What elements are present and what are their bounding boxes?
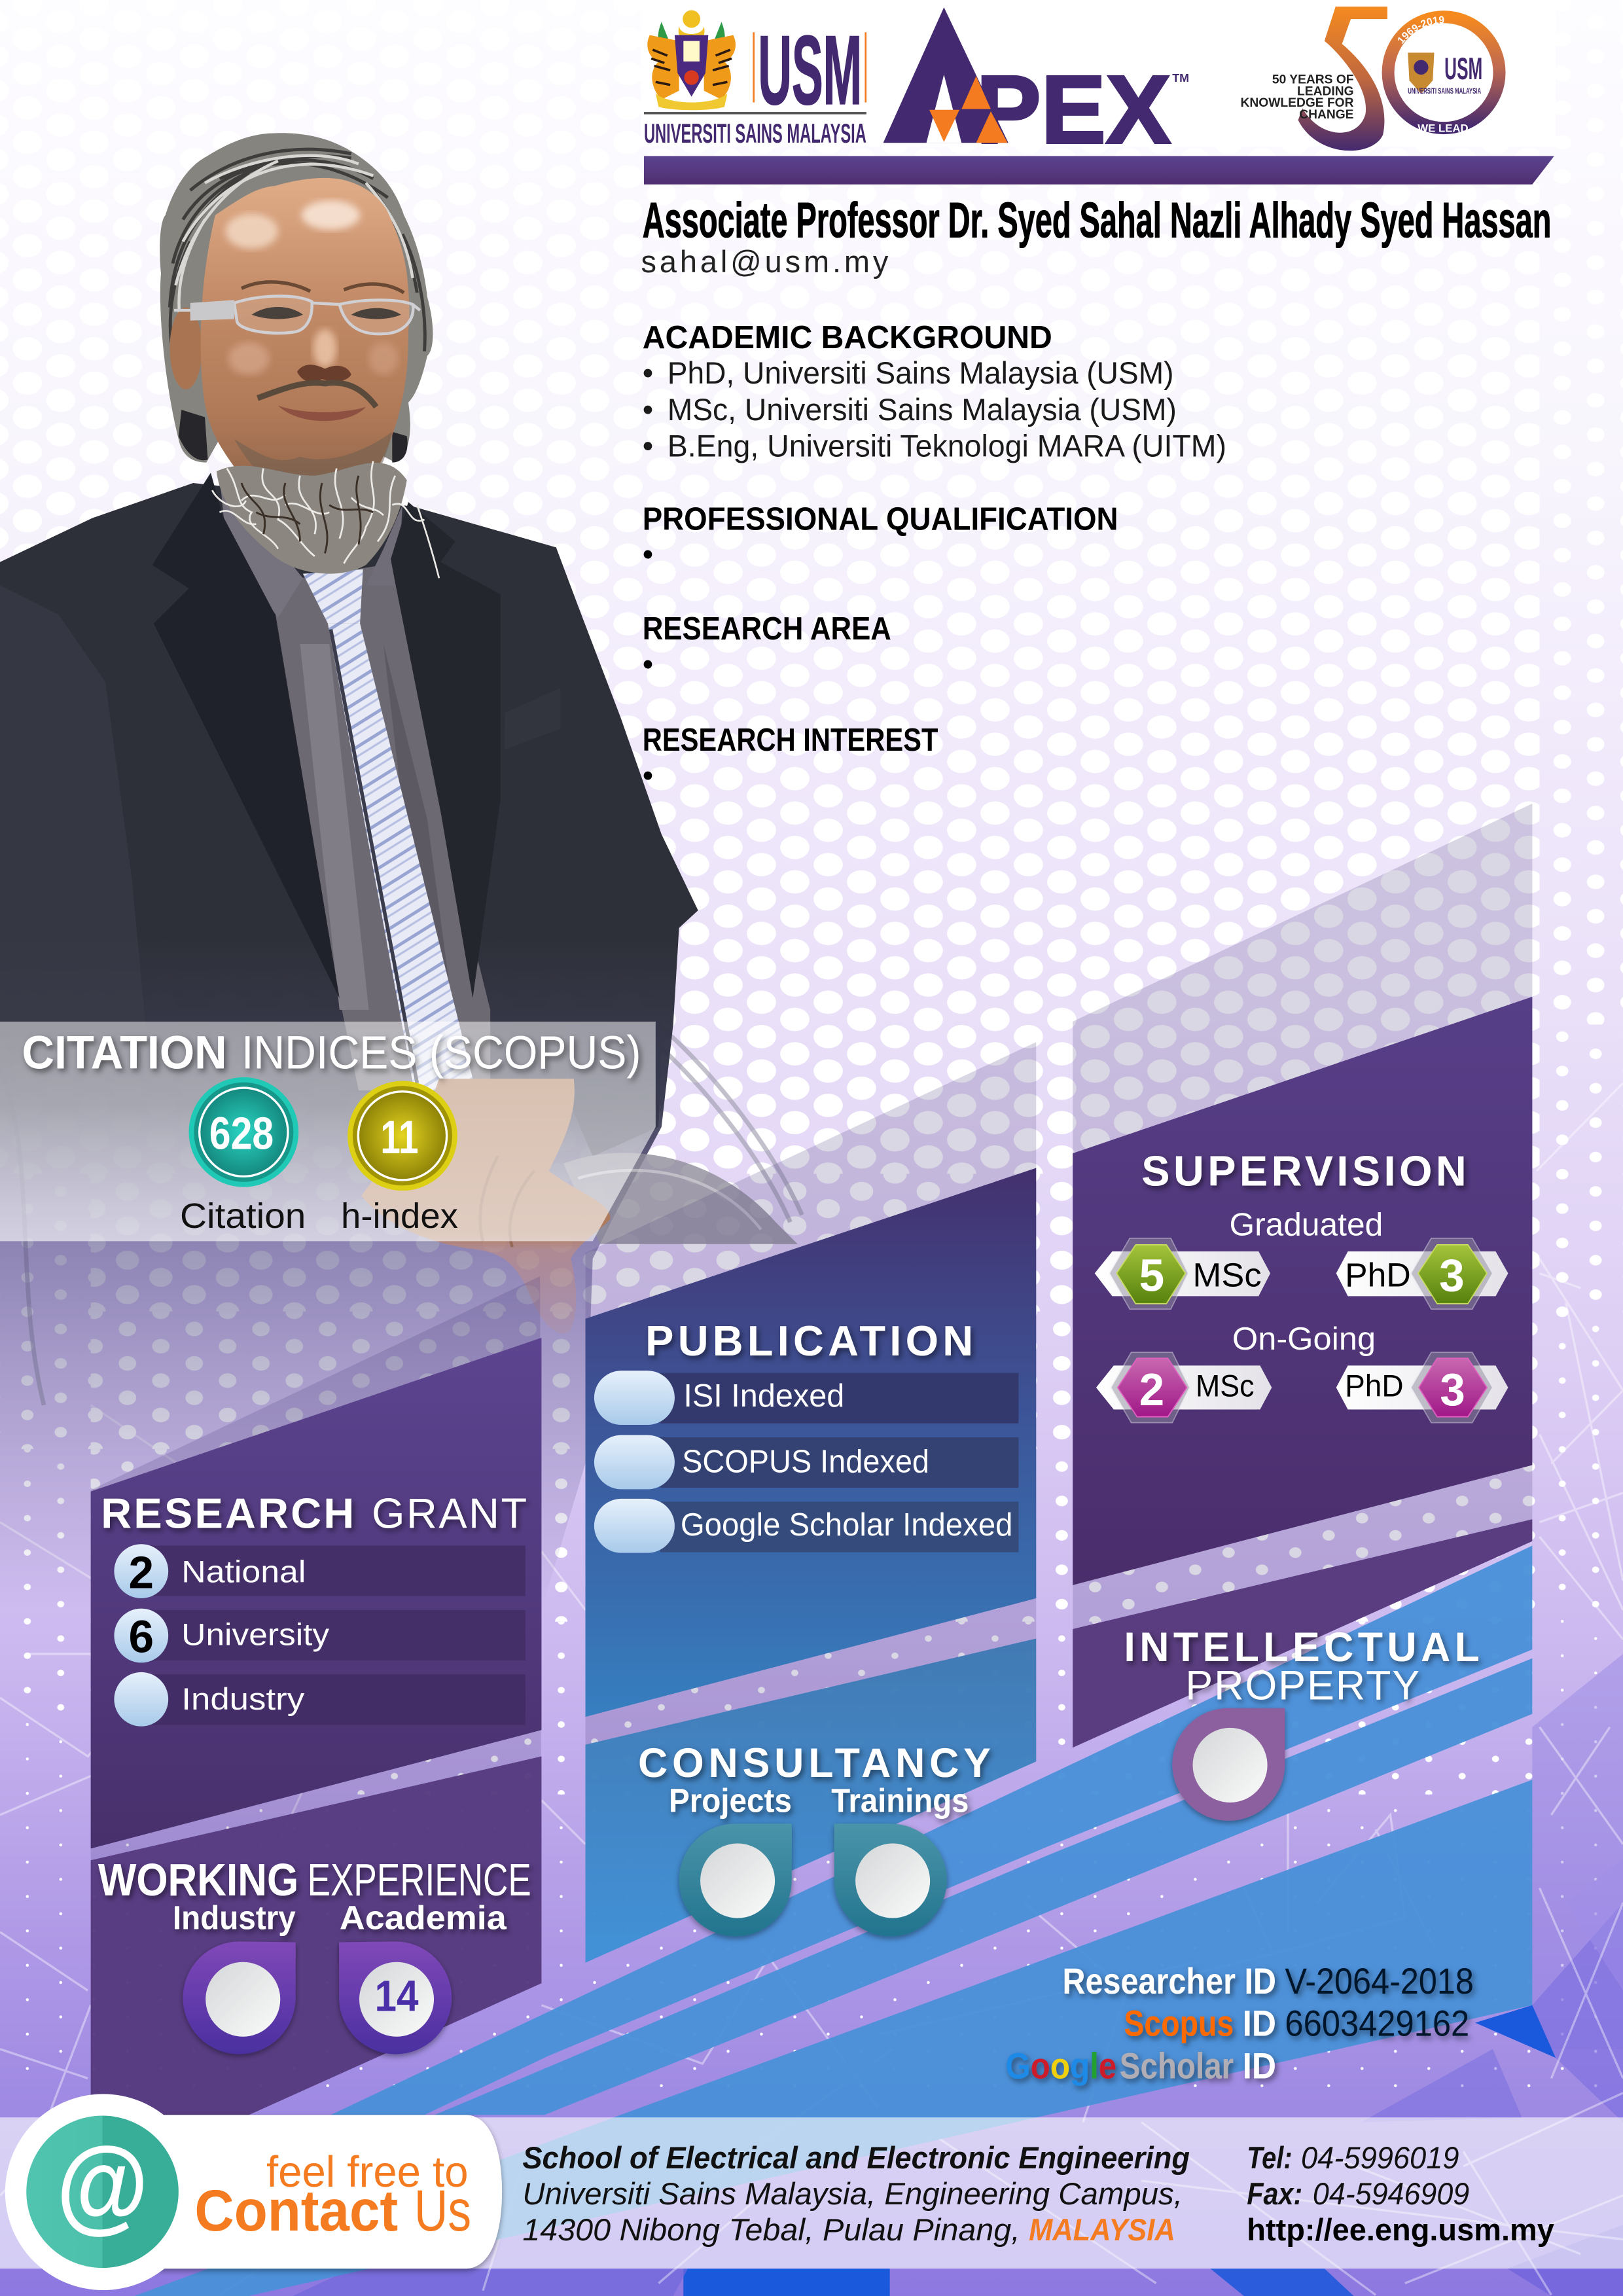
moustache and mouth <box>258 383 376 407</box>
row: industry: Industry <box>181 1681 305 1716</box>
panel: research grant <box>91 1338 541 1848</box>
forehead highlights <box>225 213 278 249</box>
label: graduated: Graduated <box>1229 1206 1383 1242</box>
text: feel free to: feel free to <box>266 2147 469 2197</box>
inner usm: USM <box>1444 51 1482 86</box>
heading: working experience: EXPERIENCE <box>308 1854 531 1905</box>
heading: citation indices: INDICES (SCOPUS) <box>241 1026 641 1079</box>
badge: trainings <box>834 1823 947 1937</box>
block: academic background <box>643 319 1226 463</box>
label: citation: Citation <box>180 1196 306 1236</box>
logo: universiti sains malaysia <box>644 10 866 149</box>
sleeve cuff <box>563 1024 662 1157</box>
heading: research grant <box>101 1490 527 1537</box>
logo: 50 years <box>1241 7 1506 151</box>
wordmark accent lines <box>754 32 866 103</box>
postcode: 14300 Nibong Tebal, Pulau Pinang, <box>522 2212 1020 2247</box>
nose <box>297 365 351 382</box>
item: • <box>643 392 653 427</box>
badge: graduated phd: PhD <box>1345 1256 1411 1294</box>
email: sahal@usm.my <box>641 244 889 279</box>
row: national <box>114 1544 526 1598</box>
portrait of the professor <box>0 133 802 1610</box>
block: professional qualification: • <box>643 537 653 571</box>
trademark: TM <box>1172 71 1189 84</box>
badge: graduated msc: MSc <box>1193 1256 1262 1294</box>
badge: h-index <box>348 1081 457 1191</box>
ring dates <box>1393 24 1494 66</box>
block: research area: RESEARCH AREA <box>643 611 891 647</box>
researcher identifiers: V-2064-2018 <box>1285 1960 1474 2001</box>
label: on-going: On-Going <box>1232 1321 1376 1357</box>
white logo backing <box>641 0 1219 147</box>
badge: industry years <box>183 1941 296 2054</box>
scopus id: Scopus <box>1124 2003 1234 2044</box>
divider <box>644 112 866 115</box>
researcher identifiers: Scholar <box>1120 2045 1234 2086</box>
heading: intellectual property: INTELLECTUAL <box>1124 1624 1480 1670</box>
face <box>201 178 409 512</box>
row: isi indexed: ISI Indexed <box>683 1378 844 1414</box>
block: research interest <box>643 722 938 793</box>
row: university: 6 <box>129 1611 154 1662</box>
heading: supervision: SUPERVISION <box>1141 1147 1467 1194</box>
panel: publication backing <box>585 1042 1036 1963</box>
brows and eyes <box>241 282 404 293</box>
heading: intellectual property <box>1124 1624 1480 1708</box>
telephone: Tel: <box>1247 2140 1293 2175</box>
jacket <box>0 483 698 1610</box>
chin stubble <box>234 432 392 512</box>
hands <box>361 1079 611 1333</box>
row: scopus indexed: SCOPUS Indexed <box>682 1444 929 1480</box>
badge: graduated msc: 5 <box>1139 1249 1164 1300</box>
heading: working experience <box>98 1854 531 1905</box>
tagline: CHANGE <box>1299 108 1354 122</box>
heading: publication: PUBLICATION <box>645 1317 973 1365</box>
row: google scholar indexed <box>594 1499 1018 1553</box>
heading: research grant: RESEARCH <box>101 1490 354 1537</box>
block: research interest: • <box>643 758 653 793</box>
row: university: University <box>181 1617 330 1652</box>
labels: projects trainings <box>669 1781 969 1819</box>
ring <box>1388 17 1499 128</box>
panel: research grant backing <box>91 1276 541 2115</box>
heading: ACADEMIC BACKGROUND <box>643 319 1052 355</box>
footer band <box>0 2117 1623 2269</box>
tagline: 50 YEARS OF <box>1272 73 1354 86</box>
telephone: 04-5996019 <box>1301 2140 1459 2175</box>
labels: industry academia <box>173 1898 507 1936</box>
badge: on-going msc: 2 <box>1139 1364 1164 1415</box>
inner caption: UNIVERSITI SAINS MALAYSIA <box>1408 86 1481 96</box>
wordmark: universiti sains malaysia: UNIVERSITI SAINS MALAYSIA <box>644 118 866 149</box>
heading: working experience: WORKING <box>98 1854 298 1905</box>
polygon web lines <box>0 1083 1623 2295</box>
labels: industry academia: Academia <box>340 1898 507 1936</box>
badge: on-going phd <box>1336 1352 1508 1423</box>
block: research area <box>643 611 891 681</box>
icon: at sign: @ <box>56 2125 149 2243</box>
collar <box>219 476 303 618</box>
item: • <box>643 355 653 390</box>
footer: contact details <box>1247 2140 1554 2247</box>
beard <box>217 463 407 574</box>
campus: Universiti Sains Malaysia, Engineering Campus, <box>522 2176 1183 2211</box>
label: h-index: h-index <box>341 1196 458 1236</box>
shirt <box>275 564 490 1090</box>
glasses <box>174 296 420 334</box>
jacket pocket <box>505 688 560 749</box>
numeral five <box>1298 7 1387 151</box>
text: USM <box>758 15 862 125</box>
badge: intellectual property <box>1172 1708 1285 1821</box>
logo: apex <box>883 7 1189 164</box>
text: contact us: Contact <box>194 2178 398 2243</box>
researcher identifiers: ID <box>1243 2003 1276 2044</box>
footer: address <box>522 2140 1190 2247</box>
badge: graduated phd: 3 <box>1439 1249 1465 1300</box>
row: national: 2 <box>129 1547 154 1598</box>
tagline: LEADING <box>1297 84 1354 98</box>
fax: 04-5946909 <box>1313 2176 1469 2211</box>
block: research area: • <box>643 647 653 681</box>
panel: publication <box>585 1168 1036 1717</box>
heading: citation indices: CITATION <box>22 1026 227 1079</box>
item: MSc, Universiti Sains Malaysia (USM) <box>668 392 1177 427</box>
row: isi indexed <box>594 1371 1018 1425</box>
block: research interest: RESEARCH INTEREST <box>643 722 938 758</box>
footer: contact pill <box>5 2094 502 2290</box>
blue diagonal stripes <box>135 1545 1532 2296</box>
google scholar id: Google <box>1005 2045 1116 2086</box>
labels: projects trainings: Projects <box>669 1781 792 1819</box>
tagline: KNOWLEDGE FOR <box>1241 96 1354 110</box>
website: http://ee.eng.usm.my <box>1247 2212 1554 2247</box>
left lapel <box>152 473 340 998</box>
footer: contact pill: Us <box>414 2178 471 2243</box>
badge: graduated msc <box>1095 1238 1270 1309</box>
panel: working experience <box>91 1756 541 2115</box>
badge: h-index: 11 <box>380 1111 419 1164</box>
badge: projects <box>679 1823 792 1937</box>
item: • <box>643 429 653 463</box>
researcher identifiers: ID <box>1243 2045 1276 2086</box>
fax: Fax: <box>1247 2176 1302 2211</box>
badge: on-going msc: MSc <box>1196 1368 1254 1403</box>
fax <box>1247 2176 1469 2211</box>
item: PhD, Universiti Sains Malaysia (USM) <box>668 355 1173 390</box>
wordmark: pex: PEX <box>976 56 1171 164</box>
heading: intellectual property: PROPERTY <box>1185 1662 1419 1708</box>
panel: supervision <box>1073 997 1532 1585</box>
school: School of Electrical and Electronic Engineering <box>522 2140 1190 2175</box>
hair <box>160 133 433 463</box>
row: google scholar indexed: Google Scholar Indexed <box>681 1507 1012 1543</box>
labels: projects trainings: Trainings <box>831 1781 969 1819</box>
ear <box>169 308 202 389</box>
panel: consultancy <box>585 1638 1036 1963</box>
row: national: National <box>181 1554 306 1588</box>
tie <box>328 624 476 1090</box>
badge: academia years <box>339 1941 452 2054</box>
header bar <box>644 156 1554 185</box>
heading: consultancy: CONSULTANCY <box>638 1740 991 1786</box>
badge: academia years: 14 <box>374 1972 419 2021</box>
panel: citation indices band <box>0 1022 656 1241</box>
badge: on-going phd: PhD <box>1345 1368 1404 1403</box>
researcher identifiers: 6603429162 <box>1285 2003 1469 2044</box>
tagline <box>1241 73 1354 122</box>
badge: on-going msc <box>1096 1352 1272 1423</box>
labels: industry academia: Industry <box>173 1898 296 1936</box>
panel: supervision backing <box>1073 804 1532 1748</box>
left sleeve highlight <box>0 585 147 1032</box>
icon: at sign <box>5 2094 201 2290</box>
researcher identifiers <box>1005 1960 1474 2086</box>
badge: citation count <box>188 1077 298 1187</box>
panel: intellectual property <box>1073 1519 1532 1821</box>
lap <box>563 1153 798 1244</box>
block: professional qualification: PROFESSIONAL QUALIFICATION <box>643 501 1118 537</box>
item: B.Eng, Universiti Teknologi MARA (UITM) <box>668 429 1226 463</box>
researcher id: Researcher ID <box>1063 1960 1276 2001</box>
row: scopus indexed <box>594 1435 1018 1489</box>
crest <box>647 10 736 110</box>
inner crest <box>1408 53 1435 94</box>
country: MALAYSIA <box>1029 2212 1175 2247</box>
badge: on-going phd: 3 <box>1440 1364 1465 1415</box>
low-poly background facets <box>293 1654 1623 2296</box>
heading: citation indices <box>22 1026 641 1079</box>
right lapel <box>391 502 501 998</box>
row: university <box>114 1609 526 1662</box>
row: industry <box>114 1672 526 1727</box>
badge: graduated phd <box>1336 1238 1508 1309</box>
block: professional qualification <box>643 501 1118 571</box>
ring slogan: WE LEAD <box>1418 122 1469 134</box>
logo: 50 years: 1969-2019 <box>1398 16 1444 45</box>
badge: citation count: 628 <box>209 1107 274 1158</box>
heading: research grant: GRANT <box>372 1490 527 1537</box>
wheelchair frame <box>0 1024 802 1405</box>
